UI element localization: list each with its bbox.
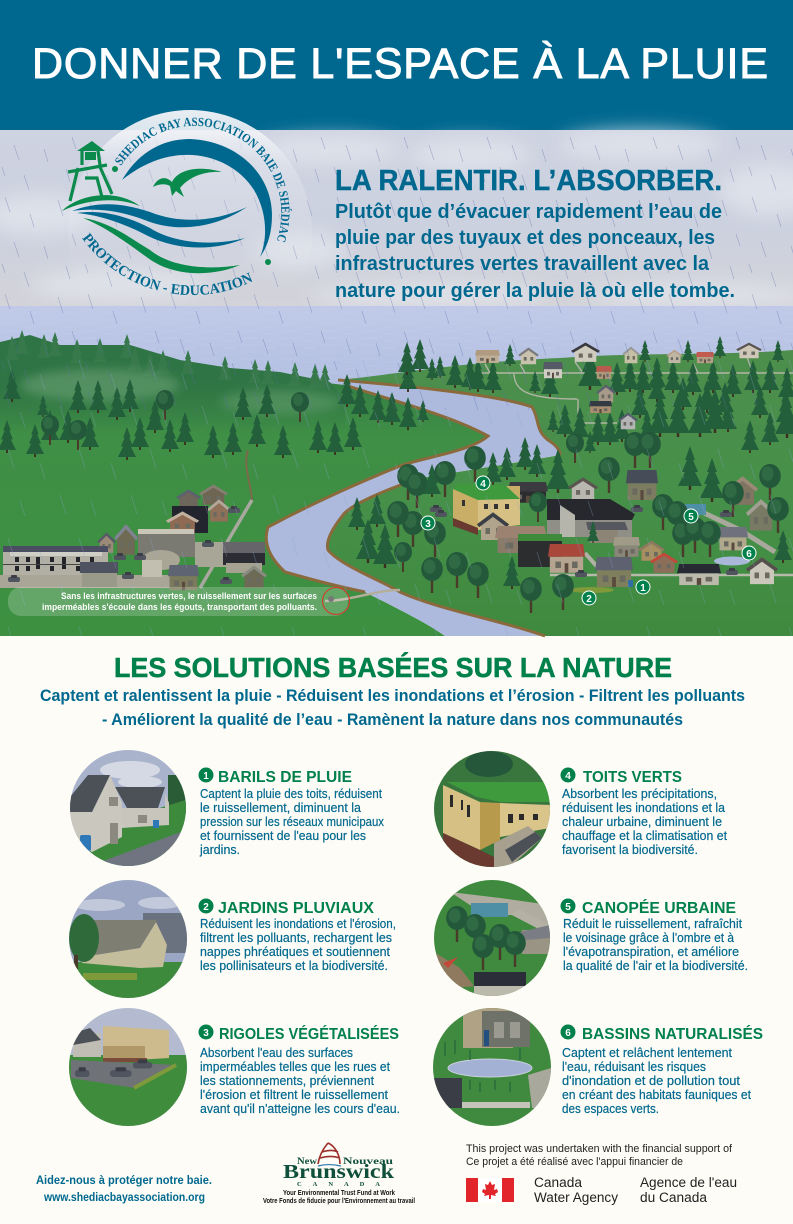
New Brunswick Environmental Trust Fund logo: Your Environmental Trust Fund at Work bbox=[283, 1190, 395, 1197]
New Brunswick Environmental Trust Fund logo: New bbox=[297, 1157, 317, 1167]
card 1 text: Captent la pluie des toits, réduisent bbox=[200, 786, 382, 801]
section subtitle bbox=[40, 686, 745, 729]
photo circle: houses with rain barrels bbox=[70, 750, 188, 866]
building with green roof, marker 4 bbox=[453, 484, 520, 535]
section subtitle: - Améliorent la qualité de l’eau - Ramènent la nature dans nos communautés bbox=[102, 710, 683, 729]
Canada Water Agency wordmark: Water Agency bbox=[534, 1190, 618, 1205]
footer call to action: Aidez-nous à protéger notre baie. bbox=[36, 1175, 212, 1187]
card 6 text: Captent et relâchent lentement bbox=[562, 1045, 732, 1060]
card 3 heading: RIGOLES VÉGÉTALISÉES bbox=[219, 1024, 399, 1043]
card 6 text: des espaces verts. bbox=[562, 1101, 659, 1116]
card 3 text: l'érosion et filtrent le ruissellement bbox=[200, 1087, 388, 1102]
card 4 text: chaleur urbaine, diminuent le bbox=[562, 814, 722, 829]
card 3 text: imperméables telles que les rues et bbox=[200, 1059, 390, 1074]
New Brunswick Environmental Trust Fund logo: Brunswick bbox=[283, 1161, 395, 1183]
bullet 2: 2 bbox=[203, 902, 209, 913]
card 6 text bbox=[562, 1045, 751, 1116]
intro paragraph: infrastructures vertes travaillent avec la bbox=[335, 253, 710, 275]
river bbox=[266, 380, 560, 636]
New Brunswick Environmental Trust Fund logo: Nouveau bbox=[343, 1157, 394, 1167]
bullet 3 bbox=[198, 1024, 214, 1040]
card 2: rain gardens bbox=[69, 880, 396, 998]
card 6 text: l'eau, réduisant les risques bbox=[562, 1059, 706, 1074]
card 3 text: avant qu'il n'atteigne les cours d'eau. bbox=[200, 1101, 400, 1116]
card 6 text: d'inondation et de pollution tout bbox=[562, 1073, 740, 1088]
card 2 text bbox=[200, 916, 396, 973]
intro paragraph: nature pour gérer la pluie là où elle tombe. bbox=[335, 280, 735, 302]
card 3 text bbox=[200, 1045, 400, 1116]
section heading: LES SOLUTIONS BASÉES SUR LA NATURE bbox=[114, 652, 672, 683]
card 2 text: les pollinisateurs et la biodiversité. bbox=[200, 958, 388, 973]
logo text top: SHEDIAC BAY ASSOCIATION BAIE DE SHÉDIAC bbox=[115, 118, 292, 242]
intro paragraph: Plutôt que d’évacuer rapidement l’eau de bbox=[335, 201, 722, 223]
card 3 text: Absorbent l'eau des surfaces bbox=[200, 1045, 353, 1060]
left bank hillside bbox=[0, 350, 488, 636]
card 6 heading: BASSINS NATURALISÉS bbox=[582, 1024, 763, 1043]
ship icon bbox=[318, 1143, 341, 1166]
map markers 1 to 6: 1 bbox=[640, 583, 646, 594]
logo text bottom: PROTECTION - EDUCATION bbox=[82, 232, 252, 296]
card 2 text: filtrent les polluants, rechargent les bbox=[200, 930, 392, 945]
sky with clouds bbox=[0, 130, 793, 307]
bullet 6: 6 bbox=[565, 1028, 571, 1039]
card 5 text bbox=[563, 916, 748, 973]
card 4 text bbox=[562, 786, 727, 857]
funder acknowledgement bbox=[466, 1143, 737, 1205]
caption pill about runoff: Sans les infrastructures vertes, le ruissellement sur les surfaces bbox=[61, 591, 317, 601]
right hillside roads bbox=[480, 357, 793, 423]
rain overlay bbox=[0, 130, 793, 636]
bullet 5: 5 bbox=[565, 902, 571, 913]
card 3 text: les stationnements, préviennent bbox=[200, 1073, 374, 1088]
intro paragraph bbox=[335, 201, 735, 302]
footer call to action bbox=[36, 1175, 212, 1204]
intro heading: LA RALENTIR. L’ABSORBER. bbox=[335, 165, 722, 197]
card 1: rain barrels bbox=[70, 750, 384, 866]
map markers 1 to 6: 3 bbox=[425, 519, 431, 530]
New Brunswick Environmental Trust Fund logo: Votre Fonds de fiducie pour l'Environnement au travail bbox=[263, 1198, 415, 1205]
title: DONNER DE L'ESPACE À LA PLUIE bbox=[32, 40, 768, 88]
photo circle: house with rain garden bbox=[69, 880, 187, 998]
map markers 1 to 6: 5 bbox=[688, 512, 694, 523]
map markers 1 to 6: 4 bbox=[480, 479, 486, 490]
logo large blue arc bbox=[122, 139, 272, 257]
bullet 2 bbox=[198, 898, 214, 914]
Canada Water Agency wordmark: du Canada bbox=[640, 1190, 707, 1205]
New Brunswick Environmental Trust Fund logo bbox=[263, 1143, 415, 1205]
card 6: naturalized basins bbox=[433, 1008, 763, 1126]
funder acknowledgement: This project was undertaken with the financial support of bbox=[466, 1143, 733, 1155]
large dark-roofed house bbox=[547, 499, 635, 543]
logo waves bbox=[72, 204, 247, 273]
map markers 1 to 6 bbox=[421, 476, 756, 605]
Canada Water Agency wordmark: Agence de l'eau bbox=[640, 1175, 737, 1190]
card 3: vegetated swales bbox=[69, 1008, 400, 1126]
Canada Water Agency wordmark bbox=[534, 1175, 737, 1205]
right hillside conifers bbox=[398, 336, 793, 502]
card 1 heading: BARILS DE PLUIE bbox=[218, 769, 352, 786]
distant houses bbox=[475, 343, 761, 429]
logo bird bbox=[153, 169, 222, 197]
apartment building bbox=[3, 546, 108, 575]
logo green dots bbox=[112, 166, 271, 265]
footer call to action: www.shediacbayassociation.org bbox=[43, 1192, 205, 1204]
card 2 text: nappes phréatiques et soutiennent bbox=[200, 944, 390, 959]
card 6 text: en créant des habitats fauniques et bbox=[562, 1087, 751, 1102]
card 1 text: jardins. bbox=[199, 842, 240, 857]
right bank hillside bbox=[327, 350, 793, 636]
bullet 6 bbox=[560, 1024, 576, 1040]
photo circle: trees among houses bbox=[434, 880, 550, 996]
card 4 text: favorisent la biodiversité. bbox=[562, 842, 698, 857]
intro paragraph: pluie par des tuyaux et des ponceaux, les bbox=[335, 227, 715, 249]
Canada Water Agency wordmark: Canada bbox=[534, 1175, 582, 1190]
card 2 text: Réduisent les inondations et l'érosion, bbox=[200, 916, 396, 931]
card 5 text: la qualité de l'air et la biodiversité. bbox=[563, 958, 748, 973]
bullet 4 bbox=[560, 768, 576, 782]
map markers 1 to 6: 6 bbox=[746, 549, 752, 560]
caption pill about runoff: imperméables s'écoule dans les égouts, transportant des polluants. bbox=[42, 602, 317, 612]
bullet 1: 1 bbox=[203, 771, 209, 782]
bullet 5 bbox=[560, 898, 576, 914]
intro text block bbox=[335, 165, 735, 302]
card 4: green roofs bbox=[434, 751, 727, 867]
card 4 text: Absorbent les précipitations, bbox=[562, 786, 717, 801]
photo circle: building with green roof bbox=[434, 751, 550, 867]
funder acknowledgement: Ce projet a été réalisé avec l'appui financier de bbox=[466, 1156, 683, 1168]
card 1 text bbox=[199, 786, 384, 857]
village roads bbox=[550, 500, 793, 575]
New Brunswick Environmental Trust Fund logo: C A N A D A bbox=[297, 1181, 380, 1188]
left village bbox=[0, 450, 266, 590]
bullet 3: 3 bbox=[203, 1028, 209, 1039]
card 4 heading: TOITS VERTS bbox=[583, 769, 682, 786]
card 5: urban canopy bbox=[434, 880, 748, 996]
village deciduous trees bbox=[348, 446, 792, 613]
icon: Canadian flag bbox=[466, 1178, 514, 1202]
illustration: rainy landscape bbox=[0, 130, 793, 636]
card 5 heading: CANOPÉE URBAINE bbox=[582, 898, 736, 917]
map markers 1 to 6: 2 bbox=[586, 594, 592, 605]
card 1 text: le ruissellement, diminuent la bbox=[200, 800, 362, 815]
photo circle: building and parking lot bbox=[69, 1008, 187, 1126]
card 1 text: pression sur les réseaux municipaux bbox=[200, 814, 384, 829]
left forest bbox=[0, 330, 429, 460]
village houses bbox=[430, 470, 777, 587]
bullet 4: 4 bbox=[565, 771, 571, 782]
header band bbox=[0, 0, 793, 130]
association logo bbox=[62, 110, 310, 296]
card 4 text: réduisent les inondations et la bbox=[562, 800, 726, 815]
caption pill about runoff bbox=[8, 587, 348, 616]
distant lake bbox=[0, 306, 793, 416]
black house with green roof bbox=[518, 534, 562, 567]
card 5 text: Réduit le ruissellement, rafraîchit bbox=[563, 916, 742, 931]
red highlight circle on storm drain bbox=[322, 588, 350, 614]
card 4 text: chauffage et la climatisation et bbox=[562, 828, 727, 843]
card 5 text: le voisinage grâce à l'ombre et à bbox=[563, 930, 735, 945]
card 5 text: l'évapotranspiration, et améliore bbox=[563, 944, 739, 959]
section subtitle: Captent et ralentissent la pluie - Réduisent les inondations et l’érosion - Filtrent les polluants bbox=[40, 686, 745, 705]
card 2 heading: JARDINS PLUVIAUX bbox=[218, 900, 374, 917]
naturalized ponds and green space bbox=[570, 504, 750, 593]
bullet 1 bbox=[198, 768, 214, 782]
logo lighthouse bbox=[62, 141, 140, 211]
card 1 text: et fournissent de l'eau pour les bbox=[200, 828, 366, 843]
photo circle: pond behind house bbox=[433, 1008, 551, 1126]
